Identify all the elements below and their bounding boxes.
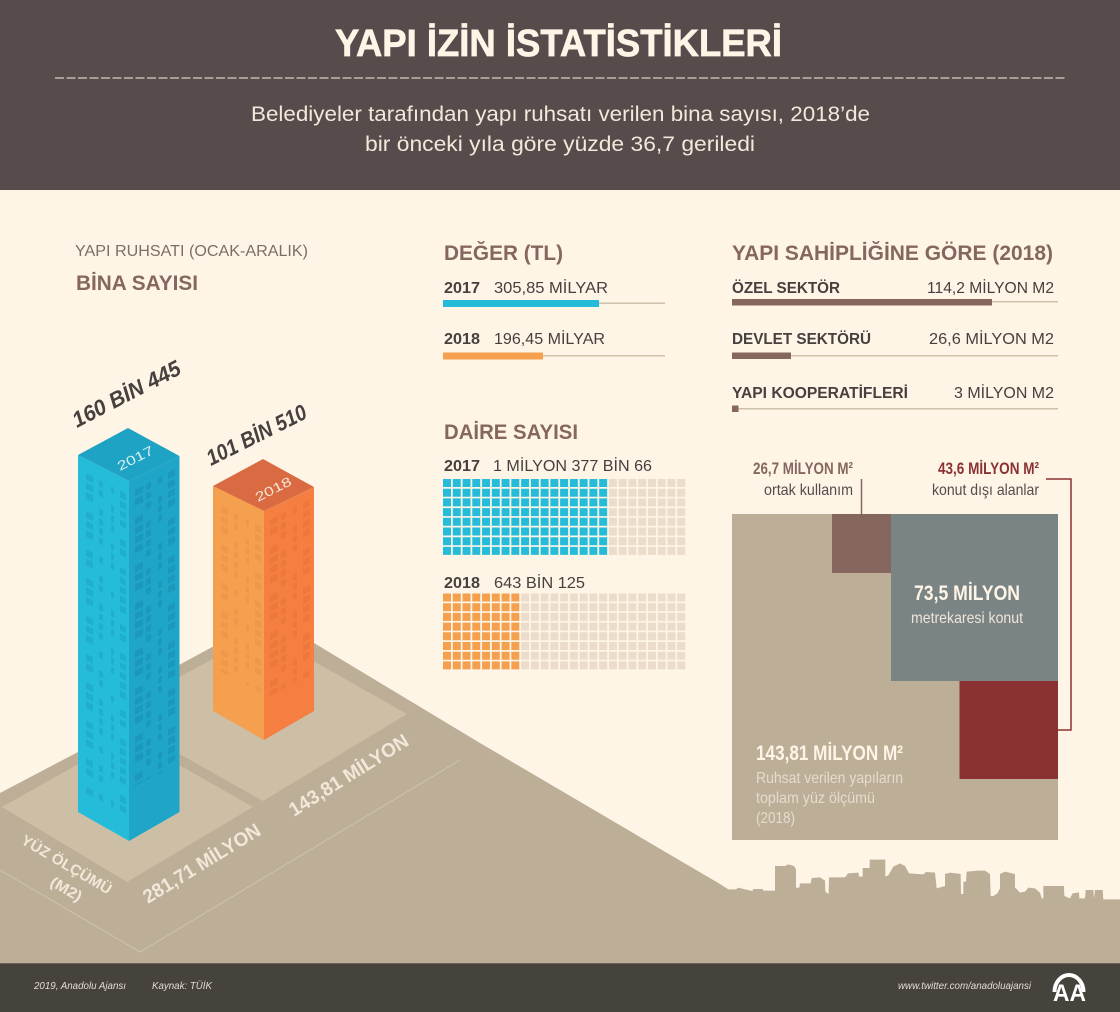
row: cooperatives [732,383,1058,412]
row: value 2018: 2018 [444,331,480,348]
total area square [732,514,1058,840]
row: value 2017: 305,85 MİLYAR [494,278,608,297]
row: private sector: ÖZEL SEKTÖR [732,278,840,297]
floor labels [18,729,413,908]
total area label: Ruhsat verilen yapıların [756,770,903,787]
panel: value [443,241,665,360]
skyline silhouette [720,860,1120,964]
housing square [891,514,1058,681]
waffle 2018: 2018 [444,575,480,592]
left heading: BİNA SAYISI [76,272,198,295]
footer credit: 2019, Anadolu Ajansı [33,980,126,992]
footer [0,963,1120,1012]
left heading [75,243,308,295]
building value 2018: 101 BİN 510 [202,399,311,470]
housing label: 73,5 MİLYON [914,582,1020,605]
housing label [911,582,1023,627]
heading: dwelling count: DAİRE SAYISI [444,421,578,444]
heading: value: DEĞER (TL) [444,241,563,265]
label: surface area: (M2) [47,874,85,905]
roof label 2017: 2017 [115,443,156,474]
total area label: toplam yüz ölçümü [756,790,875,807]
connector: common use [860,479,862,514]
non-residential square [960,681,1058,779]
ground outline [0,760,460,952]
row: public sector: 26,6 MİLYON M2 [929,329,1054,348]
callout: non-residential: 43,6 MİLYON M² [938,459,1039,478]
total area label: 143,81 MİLYON M² [756,742,903,765]
callout: common use: ortak kullanım [764,482,853,499]
footer url: www.twitter.com/anadoluajansi [898,980,1032,992]
panel: by ownership [732,241,1058,412]
icon: AA logo: AA [1053,980,1086,1007]
header banner [0,0,1120,190]
floor plate: 2017 [2,736,253,882]
row: public sector [732,329,1058,359]
callout: non-residential [932,459,1040,499]
row: private sector [732,278,1058,306]
callout: common use [753,459,853,499]
waffle 2017: 1 MİLYON 377 BİN 66 [493,456,652,475]
panel: area breakdown [732,459,1071,840]
waffle 2017: 2017 [444,458,480,475]
row: cooperatives: 3 MİLYON M2 [954,383,1054,402]
subtitle: Belediyeler tarafından yapı ruhsatı verilen bina sayısı, 2018’de [251,103,870,126]
row: value 2018: 196,45 MİLYAR [494,329,605,348]
callout: non-residential: konut dışı alanlar [932,482,1040,499]
waffle 2017 [443,456,687,551]
row: value 2018 [443,329,665,360]
floor plate: 2018 [110,632,407,801]
common-use square [832,514,891,573]
total area label: (2018) [756,810,795,827]
title: YAPI İZİN İSTATİSTİKLERİ [335,23,782,65]
label: 281,71 million: 281,71 MİLYON [139,819,265,908]
subtitle: bir önceki yıla göre yüzde 36,7 geriledi [365,133,755,156]
label: 143,81 million: 143,81 MİLYON [284,729,413,821]
row: private sector: 114,2 MİLYON M2 [927,278,1054,297]
building 2018 [213,459,314,740]
row: cooperatives: YAPI KOOPERATİFLERİ [732,384,908,402]
building 2017 [78,428,180,841]
building value 2017: 160 BİN 445 [68,355,186,432]
connector: non-residential [1046,479,1071,730]
row: value 2017 [443,278,665,307]
row: value 2017: 2017 [444,280,480,297]
waffle 2018: 643 BİN 125 [494,573,585,592]
panel: dwelling count [443,421,687,665]
subtitle [251,103,870,156]
roof label 2018: 2018 [253,474,294,505]
left heading: YAPI RUHSATI (OCAK-ARALIK) [75,243,308,260]
row: public sector: DEVLET SEKTÖRÜ [732,329,871,348]
callout: common use: 26,7 MİLYON M² [753,459,853,478]
ground plane with skyline [0,620,1120,964]
total area label [756,742,903,827]
housing label: metrekaresi konut [911,610,1023,627]
label: surface area: YÜZ ÖLÇÜMÜ [18,832,114,898]
heading: by ownership: YAPI SAHİPLİĞİNE GÖRE (2018) [732,241,1053,265]
waffle 2018 [443,573,687,665]
footer source: Kaynak: TÜİK [152,980,213,992]
